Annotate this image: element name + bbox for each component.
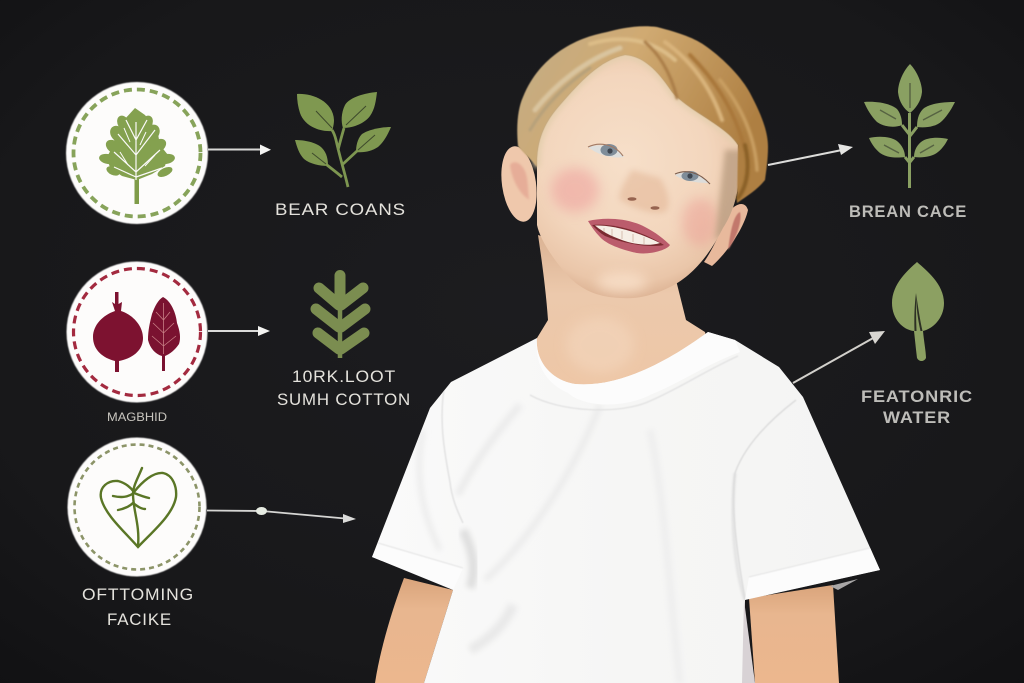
- badge: heart leaf: [68, 438, 206, 576]
- icon: beet: [93, 292, 143, 372]
- label: offtoming: OFTTOMING: [82, 586, 194, 604]
- label: facike: FACIKE: [107, 611, 172, 629]
- sleeve seam: right: [733, 400, 796, 600]
- cuff: right: [745, 547, 880, 600]
- eye: right: [675, 171, 710, 184]
- arm: left: [375, 578, 453, 683]
- top right callout: leaf plant: [768, 64, 967, 221]
- neck: [530, 235, 720, 405]
- boy photo: [372, 26, 880, 683]
- label: sumh cotton: SUMH COTTON: [277, 391, 411, 409]
- arm: right: [749, 585, 839, 683]
- cuff: left: [372, 550, 453, 590]
- label: featonric: FEATONRIC: [861, 387, 973, 406]
- icon: five-leaf plant: [864, 64, 955, 188]
- arrow: tree to leaf: [208, 144, 271, 155]
- label: water: WATER: [883, 408, 951, 427]
- row 2: beet badge, arrow, sprig icon and labels: [66, 262, 411, 424]
- right callout: single leaf: [793, 262, 973, 427]
- label: magbhid: MAGBHID: [107, 410, 167, 424]
- arrow: beet to sprig: [208, 326, 270, 336]
- face: [537, 55, 745, 298]
- icon: tree: [98, 108, 176, 204]
- icon: branch with four leaves: [295, 92, 391, 187]
- arrow: heart leaf to shirt: [207, 507, 356, 523]
- hair: [517, 26, 768, 203]
- icon: red leaf: [148, 297, 180, 371]
- ear: right: [704, 204, 748, 266]
- arrow: hair to plant: [768, 144, 853, 165]
- icon: heart leaf: [101, 468, 176, 547]
- badge: tree: [66, 82, 208, 224]
- row 1: tree badge, arrow, leaf icon and label: [66, 82, 406, 224]
- arrow: shoulder to leaf: [793, 331, 885, 383]
- shirt collar: [537, 332, 740, 405]
- badge: beet and leaf: [66, 262, 208, 402]
- eye: left: [588, 144, 624, 158]
- smile: [588, 219, 670, 253]
- nose: [628, 197, 660, 210]
- t-shirt: [372, 332, 880, 683]
- label: brean cace: BREAN CACE: [849, 202, 967, 221]
- label: bear coans: BEAR COANS: [275, 201, 406, 219]
- label: york loot: 10RK.LOOT: [292, 368, 396, 386]
- icon: single leaf: [892, 262, 944, 361]
- row 3: heart-leaf badge, arrow and labels: [68, 438, 356, 629]
- ear: left: [497, 144, 541, 224]
- icon: sprig: [316, 276, 365, 358]
- sleeve seam: left: [442, 383, 463, 523]
